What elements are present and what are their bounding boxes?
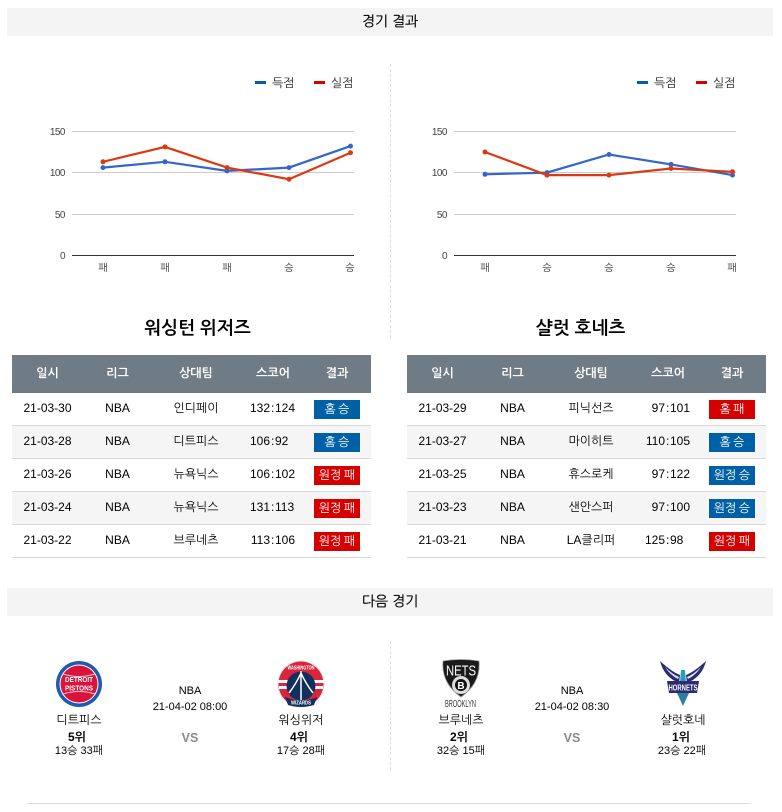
label: Washington rank: 4위 <box>290 730 308 744</box>
icon: Detroit Pistons logo: PISTONS <box>65 686 93 692</box>
row: 원정 패 <box>319 534 355 548</box>
y axis and grid: 150 <box>432 127 448 138</box>
x axis labels: 패 <box>222 262 232 274</box>
icon: Brooklyn Nets logo: B <box>457 681 465 692</box>
row: 21-03-24 <box>23 500 72 514</box>
row: 101 <box>670 401 690 415</box>
label: Charlotte team block: 샬럿호네 <box>660 713 706 727</box>
icon: Washington Wizards logo: WIZARDS <box>291 700 312 706</box>
row: NBA <box>500 533 525 547</box>
row: 106 <box>250 434 270 448</box>
label: Detroit record: 13승 33패 <box>55 745 103 757</box>
x axis labels <box>98 262 355 274</box>
line: points scored <box>100 144 353 173</box>
line: points scored <box>482 152 735 178</box>
chart: Charlotte Hornets recent scores <box>432 76 737 274</box>
row <box>12 492 371 525</box>
row: : <box>271 500 274 514</box>
row: 92 <box>275 434 288 448</box>
label: Charlotte rank: 1위 <box>672 730 690 744</box>
row: 마이히트 <box>568 434 614 448</box>
row: : <box>271 533 274 547</box>
label: Detroit rank: 5위 <box>68 730 86 744</box>
legend: scored and conceded: 실점 <box>713 76 736 90</box>
icon: Detroit Pistons logo <box>56 661 102 707</box>
row <box>12 525 371 558</box>
icon: Detroit Pistons logo: DETROIT <box>65 677 94 684</box>
row: 21-03-27 <box>418 434 467 448</box>
row: 97 <box>652 500 665 514</box>
x axis labels: 승 <box>666 262 676 274</box>
label: Washington record: 17승 28패 <box>277 745 325 757</box>
row <box>12 459 371 492</box>
row: 106 <box>275 533 295 547</box>
x axis labels: 승 <box>604 262 614 274</box>
table header: 리그 <box>501 366 524 380</box>
row: 21-03-29 <box>418 401 467 415</box>
row <box>12 393 371 426</box>
table header: 일시 <box>431 366 454 380</box>
row: : <box>271 401 274 415</box>
row: 105 <box>670 434 690 448</box>
label: Brooklyn record: 32승 15패 <box>437 745 485 757</box>
y axis and grid: 50 <box>437 210 448 221</box>
row: 21-03-23 <box>418 500 467 514</box>
icon: Brooklyn Nets logo: BROOKLYN <box>445 699 476 710</box>
text: match 1 league and time <box>153 685 227 713</box>
footer rule <box>27 803 751 804</box>
text: match 2 league and time <box>535 685 609 713</box>
row: NBA <box>105 401 130 415</box>
row: 원정 패 <box>714 534 750 548</box>
row: NBA <box>500 401 525 415</box>
row: 디트피스 <box>173 434 219 448</box>
y axis and grid: 100 <box>50 168 66 179</box>
row: 원정 패 <box>319 468 355 482</box>
legend: scored and conceded: 득점 <box>272 76 295 90</box>
row: 113 <box>275 500 294 514</box>
y axis and grid: 0 <box>442 251 448 262</box>
y axis and grid <box>50 127 354 262</box>
table header <box>407 355 766 393</box>
table header: 스코어 <box>651 366 685 380</box>
row: 122 <box>670 467 690 481</box>
row: 브루네츠 <box>173 533 219 547</box>
row: NBA <box>105 467 130 481</box>
icon: Charlotte Hornets logo <box>660 661 706 706</box>
table header <box>12 355 371 393</box>
row: 인디페이 <box>173 401 219 415</box>
x axis labels: 승 <box>345 262 355 274</box>
text: VS: VS <box>182 731 198 745</box>
label: Detroit team block: 디트피스 <box>56 713 102 727</box>
icon: Washington Wizards logo: WASHINGTON <box>288 666 315 672</box>
table header: 상대팀 <box>574 366 608 380</box>
row: NBA <box>500 500 525 514</box>
row: : <box>271 434 274 448</box>
row: 97 <box>652 467 665 481</box>
row: 106 <box>250 467 270 481</box>
x axis labels <box>480 262 737 274</box>
y axis and grid: 150 <box>50 127 66 138</box>
label: Washington team block: 워싱위저 <box>278 713 324 727</box>
heading: match results: 경기 결과 <box>362 13 418 29</box>
chart: Washington Wizards recent scores <box>50 76 355 274</box>
row: : <box>666 533 669 547</box>
heading: Washington Wizards: 워싱턴 위저즈 <box>144 318 251 338</box>
y axis and grid: 0 <box>60 251 66 262</box>
row: 원정 승 <box>714 468 750 482</box>
row: 홈 승 <box>325 402 349 416</box>
table header: 결과 <box>326 366 348 380</box>
row: 21-03-26 <box>23 467 72 481</box>
label: Brooklyn rank: 2위 <box>450 730 468 744</box>
y axis and grid: 100 <box>432 168 448 179</box>
row: 원정 승 <box>714 501 750 515</box>
row <box>12 426 371 459</box>
table: Washington results <box>12 355 371 558</box>
y axis and grid <box>432 127 736 262</box>
row: 홈 승 <box>325 435 349 449</box>
row: 홈 패 <box>720 402 744 416</box>
line: points conceded <box>100 144 353 182</box>
row: : <box>666 467 669 481</box>
row: 뉴욕닉스 <box>173 500 219 514</box>
table header: 결과 <box>721 366 743 380</box>
row <box>407 525 766 558</box>
divider between charts <box>390 64 391 338</box>
table: Charlotte results <box>407 355 766 558</box>
legend: scored and conceded <box>255 76 354 90</box>
row: : <box>666 434 669 448</box>
row: : <box>666 500 669 514</box>
icon: Charlotte Hornets logo: HORNETS <box>668 684 698 692</box>
row: : <box>271 467 274 481</box>
icon: Brooklyn Nets logo <box>442 659 480 710</box>
table header: 상대팀 <box>179 366 213 380</box>
table header: 스코어 <box>256 366 290 380</box>
row: 113 <box>251 533 270 547</box>
table header: 리그 <box>106 366 129 380</box>
row: 131 <box>250 500 270 514</box>
row: NBA <box>500 467 525 481</box>
text: match 2 league and time: NBA <box>561 685 583 697</box>
row: 원정 패 <box>319 501 355 515</box>
row <box>407 492 766 525</box>
row: NBA <box>105 533 130 547</box>
label: Brooklyn team block: 브루네츠 <box>438 713 484 727</box>
heading: next game: 다음 경기 <box>362 593 418 609</box>
row: 97 <box>652 401 665 415</box>
x axis labels: 패 <box>160 262 170 274</box>
row: : <box>666 401 669 415</box>
text: match 1 league and time: 21-04-02 08:00 <box>153 701 227 713</box>
row: 98 <box>670 533 683 547</box>
row: 21-03-22 <box>23 533 72 547</box>
x axis labels: 패 <box>727 262 737 274</box>
row: 홈 승 <box>720 435 744 449</box>
row <box>407 393 766 426</box>
x axis labels: 승 <box>284 262 294 274</box>
row <box>407 459 766 492</box>
row: 110 <box>646 434 665 448</box>
x axis labels: 패 <box>480 262 490 274</box>
line: points conceded <box>482 150 735 178</box>
icon: Brooklyn Nets logo: NETS <box>446 662 476 680</box>
row: 피닉선즈 <box>568 401 614 415</box>
row: 21-03-21 <box>418 533 467 547</box>
table header: 일시 <box>36 366 59 380</box>
divider between matchups <box>390 641 391 770</box>
row: 뉴욕닉스 <box>173 467 219 481</box>
row: NBA <box>105 434 130 448</box>
row: 125 <box>645 533 665 547</box>
row: 21-03-28 <box>23 434 72 448</box>
y axis and grid: 50 <box>55 210 66 221</box>
row <box>407 426 766 459</box>
icon: Washington Wizards logo <box>278 660 324 708</box>
x axis labels: 승 <box>542 262 552 274</box>
row: 21-03-30 <box>23 401 72 415</box>
row: 100 <box>670 500 690 514</box>
row: 124 <box>275 401 295 415</box>
heading: match results <box>7 8 773 36</box>
row: 샌안스퍼 <box>568 500 614 514</box>
heading: next game <box>7 588 773 616</box>
label: Charlotte record: 23승 22패 <box>658 745 706 757</box>
row: 휴스로케 <box>568 467 614 481</box>
legend: scored and conceded <box>637 76 736 90</box>
row: NBA <box>105 500 130 514</box>
legend: scored and conceded: 득점 <box>654 76 677 90</box>
row: 102 <box>275 467 295 481</box>
text: match 1 league and time: NBA <box>179 685 201 697</box>
row: LA클리퍼 <box>567 533 615 547</box>
legend: scored and conceded: 실점 <box>331 76 354 90</box>
text: match 2 league and time: 21-04-02 08:30 <box>535 701 609 713</box>
row: NBA <box>500 434 525 448</box>
text: VS: VS <box>564 731 580 745</box>
heading: Charlotte Hornets: 샬럿 호네츠 <box>536 318 625 338</box>
row: 21-03-25 <box>418 467 467 481</box>
x axis labels: 패 <box>98 262 108 274</box>
row: 132 <box>250 401 270 415</box>
